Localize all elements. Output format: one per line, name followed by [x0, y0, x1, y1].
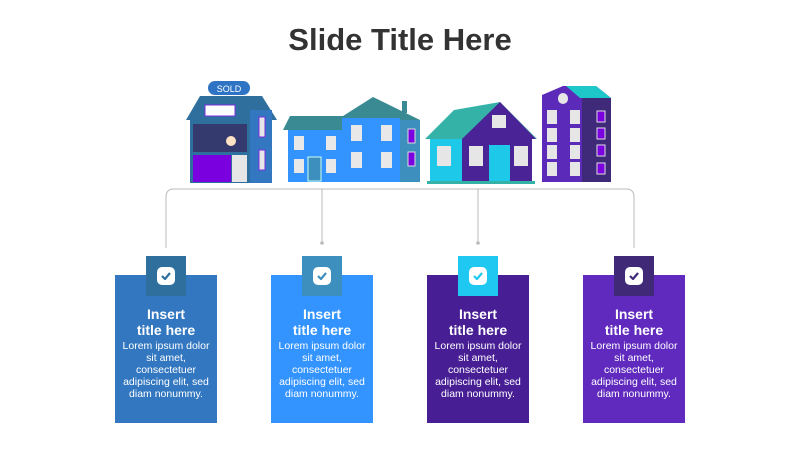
house 4 — [542, 86, 611, 182]
icon: check 4 — [614, 256, 654, 296]
houses illustration — [166, 81, 634, 248]
card 2: diam nonummy. — [285, 388, 359, 400]
card 1: Lorem ipsum dolor — [123, 340, 209, 352]
house 1 sold: SOLD — [217, 84, 242, 94]
card 2: title here — [293, 322, 351, 338]
card 4: sit amet, — [614, 352, 654, 364]
card 2: sit amet, — [302, 352, 342, 364]
card 2: adipiscing elit, sed — [279, 376, 365, 388]
card 3 — [427, 275, 529, 423]
card 3: diam nonummy. — [441, 388, 515, 400]
icon: check 2 — [302, 256, 342, 296]
card 2: Lorem ipsum dolor — [279, 340, 365, 352]
card 1: adipiscing elit, sed — [123, 376, 209, 388]
card 3: Lorem ipsum dolor — [435, 340, 521, 352]
card 3: consectetuer — [448, 364, 508, 376]
card 3: Insert — [459, 306, 497, 322]
connector lines — [166, 189, 634, 248]
card 2: Insert — [303, 306, 341, 322]
house 1 sold — [186, 81, 277, 183]
card 4: Lorem ipsum dolor — [591, 340, 677, 352]
card 4 — [583, 275, 685, 423]
house 2 — [283, 97, 420, 182]
card 4: Insert — [615, 306, 653, 322]
card 4: diam nonummy. — [597, 388, 671, 400]
card 4: adipiscing elit, sed — [591, 376, 677, 388]
card 1: diam nonummy. — [129, 388, 203, 400]
card 4: consectetuer — [604, 364, 664, 376]
icon: check 3 — [458, 256, 498, 296]
card 1: consectetuer — [136, 364, 196, 376]
card 4: title here — [605, 322, 663, 338]
card 3: sit amet, — [458, 352, 498, 364]
card 1: Insert — [147, 306, 185, 322]
card 1: sit amet, — [146, 352, 186, 364]
icon: check 1 — [146, 256, 186, 296]
card 1: title here — [137, 322, 195, 338]
title: Slide Title Here — [288, 22, 512, 57]
card 3: adipiscing elit, sed — [435, 376, 521, 388]
house 3 — [425, 102, 537, 184]
card 3: title here — [449, 322, 507, 338]
card 2: consectetuer — [292, 364, 352, 376]
card 2 — [271, 275, 373, 423]
card 1 — [115, 275, 217, 423]
